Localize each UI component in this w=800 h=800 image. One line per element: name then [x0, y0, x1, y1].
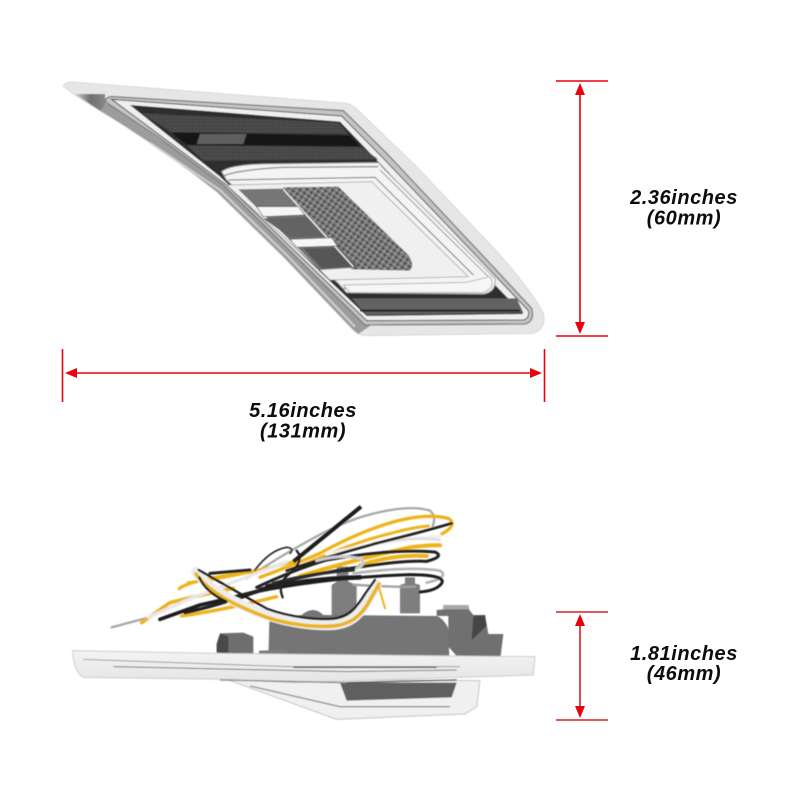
label: 1.81 inches: 1.81inches: [630, 643, 738, 665]
label: 2.36 inches: (60mm): [647, 208, 721, 230]
dark lower housing: [340, 683, 457, 701]
label: 5.16 inches: 5.16inches: [249, 400, 357, 422]
label: 1.81 inches: (46mm): [647, 663, 721, 685]
thin looped black wires and cable tie: [255, 547, 292, 570]
lower textured stripe: [352, 298, 523, 315]
label: 2.36 inches: 2.36inches: [630, 187, 738, 209]
foreground three-strand wire: [196, 570, 385, 626]
clear lens plate: [73, 651, 535, 683]
left grey edge band: [100, 103, 370, 334]
bottom light-guide highlight: [343, 277, 492, 293]
photo: top view of side marker lens: [63, 82, 544, 336]
grey posts: [332, 567, 357, 620]
grey clips, left: [217, 633, 253, 657]
second textured stripe: [187, 145, 378, 161]
left smoky tip: [75, 94, 106, 112]
dimension: width 5.16 inches: [62, 349, 544, 402]
label: 5.16 inches: (131mm): [260, 420, 346, 442]
upper textured stripe: [142, 113, 348, 134]
grey clips, right: [437, 605, 503, 656]
clear light guide: [222, 163, 495, 294]
dimension: depth 1.81 inches: [556, 612, 608, 720]
wire bundle: [112, 507, 452, 627]
outer clear lens rim: [63, 82, 544, 336]
dark textured interior: [130, 105, 523, 316]
inner housing frame: [105, 97, 532, 325]
dark slot: [172, 132, 360, 146]
reflector pattern: [283, 187, 412, 271]
dimension: height 2.36 inches: [556, 81, 608, 336]
grey blocks with clear light bars: [238, 189, 358, 270]
photo: side view with wires and housing: [73, 507, 535, 719]
left fan of wires: [142, 588, 233, 623]
lower clear lens wedge: [227, 679, 480, 719]
grey connector housing: [268, 610, 449, 658]
